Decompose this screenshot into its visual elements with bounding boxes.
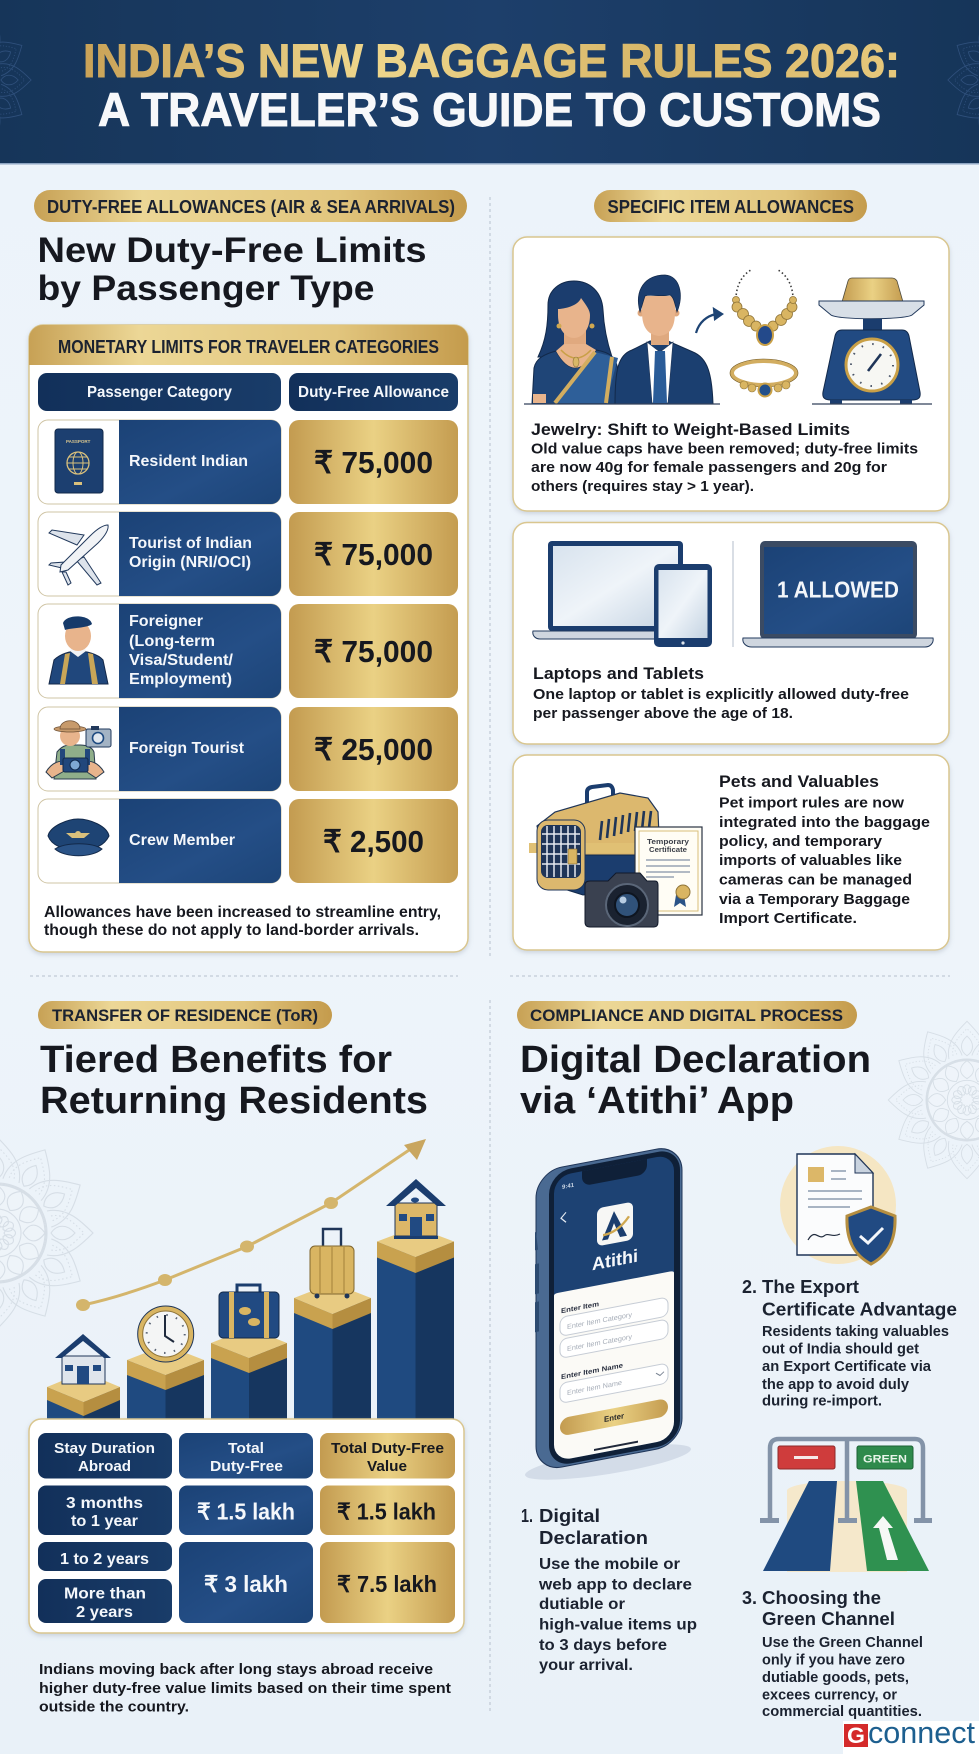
step 1 text: Use the mobile or xyxy=(539,1556,680,1573)
icon: passport: PASSPORT xyxy=(66,439,91,444)
section pill: TRANSFER OF RESIDENCE (ToR) xyxy=(52,1006,318,1025)
icon: phone with Atithi app: 9:41 xyxy=(562,1183,575,1191)
note xyxy=(39,1661,451,1716)
icon: phone with Atithi app: Enter xyxy=(604,1411,625,1424)
heading xyxy=(38,231,426,308)
table row: 3 months to 1 year: ₹ 1.5 lakh xyxy=(337,1498,436,1524)
text: pets: via a Temporary Baggage xyxy=(719,891,910,908)
step 3 text: Choosing the xyxy=(762,1587,881,1608)
title xyxy=(83,34,900,136)
text: jewelry: others (requires stay > 1 year). xyxy=(531,478,754,495)
heading: New Duty-Free Limits xyxy=(38,231,426,270)
section pill: SPECIFIC ITEM ALLOWANCES xyxy=(608,197,854,217)
text: pets xyxy=(719,773,930,927)
heading xyxy=(40,1039,428,1122)
step 1 text: dutiable or xyxy=(539,1596,625,1613)
table: stay duration benefits xyxy=(29,1419,464,1633)
bar 5 xyxy=(377,1227,454,1420)
note: higher duty-free value limits based on their time spent xyxy=(39,1680,451,1697)
step 3 text: excees currency, or xyxy=(762,1688,897,1704)
step 1 text: high-value items up xyxy=(539,1616,697,1634)
section pill: DUTY-FREE ALLOWANCES (AIR & SEA ARRIVALS) xyxy=(47,197,455,217)
section pill xyxy=(594,190,867,222)
text: laptops: One laptop or tablet is explicitly allowed duty-free xyxy=(533,686,909,703)
panel: specific item allowances xyxy=(513,190,949,950)
section pill xyxy=(34,190,467,222)
panel: transfer of residence xyxy=(29,1001,464,1716)
step 2 text: during re-import. xyxy=(762,1394,882,1410)
table note: Allowances have been increased to streamline entry, xyxy=(44,904,441,921)
text: pets: policy, and temporary xyxy=(719,833,883,850)
column headers xyxy=(38,373,458,411)
table row: 3 months to 1 year: 3 months xyxy=(66,1495,143,1512)
step 1 text: 1. xyxy=(521,1505,533,1526)
table row: 3 months to 1 year xyxy=(38,1486,455,1535)
icon: phone with Atithi app: Enter Item xyxy=(561,1301,599,1315)
note: Indians moving back after long stays abroad receive xyxy=(39,1661,433,1678)
step 1 text: Declaration xyxy=(539,1527,648,1548)
column headers: Passenger Category xyxy=(87,384,232,401)
text: pets: Pets and Valuables xyxy=(719,773,879,791)
row: foreigner: Visa/Student/ xyxy=(129,652,234,669)
icon: necklace xyxy=(732,270,797,345)
bar 4 xyxy=(294,1283,371,1420)
text: jewelry: Jewelry: Shift to Weight-Based Limits xyxy=(531,421,850,439)
panel: compliance and digital process xyxy=(517,1001,957,1720)
icon: temporary certificate: Certificate xyxy=(649,847,687,854)
heading: via ‘Atithi’ App xyxy=(520,1080,794,1122)
step 3 text: dutiable goods, pets, xyxy=(762,1670,909,1686)
table note: though these do not apply to land-border arrivals. xyxy=(44,922,419,939)
table row: 3 months to 1 year: ₹ 1.5 lakh xyxy=(197,1498,295,1524)
table row: 1 to 2 years and more than 2 years: More than xyxy=(64,1586,146,1602)
table header: Total Duty-Free xyxy=(331,1440,444,1457)
icon: pet crate xyxy=(529,785,660,895)
icon: phone with Atithi app: Atithi xyxy=(592,1246,638,1274)
row: foreign tourist: Foreign Tourist xyxy=(129,740,244,757)
step 1 text: web app to declare xyxy=(538,1576,692,1594)
icon: camera xyxy=(585,873,658,927)
row: tourist of indian origin: Tourist of Indian xyxy=(129,535,252,552)
step 3 text: only if you have zero xyxy=(762,1652,905,1668)
heading xyxy=(520,1039,871,1122)
text: pets: imports of valuables like xyxy=(719,852,902,869)
icon: bracelet xyxy=(730,359,798,396)
table row: 1 to 2 years and more than 2 years: 1 to 2 years xyxy=(60,1551,149,1568)
step 1 text: Digital xyxy=(539,1505,600,1526)
row: foreign tourist: ₹ 25,000 xyxy=(314,732,433,767)
icon: temporary certificate: Temporary xyxy=(647,839,689,846)
icon: customs channels gate: GREEN xyxy=(863,1454,907,1466)
step 3 text xyxy=(742,1587,923,1720)
text: pets: integrated into the baggage xyxy=(719,814,930,831)
row: crew member: ₹ 2,500 xyxy=(323,824,424,859)
table header: Total xyxy=(228,1440,264,1457)
icon: phone with Atithi app: Enter Item Category xyxy=(567,1334,632,1353)
row: foreign tourist xyxy=(38,707,458,791)
step 3 text: Green Channel xyxy=(762,1608,895,1629)
panel: duty-free allowances xyxy=(29,190,468,952)
row: crew member: Crew Member xyxy=(129,832,235,849)
icon: phone with Atithi app: Enter Item Name xyxy=(561,1363,623,1381)
heading: Digital Declaration xyxy=(520,1039,871,1081)
row: tourist of indian origin: ₹ 75,000 xyxy=(314,537,433,572)
row: foreigner: (Long-term xyxy=(129,633,215,650)
table header: Stay Duration xyxy=(54,1440,155,1457)
icon: laptop and tablet xyxy=(533,541,712,647)
rising trend arrow xyxy=(76,1139,426,1311)
table row: 1 to 2 years and more than 2 years: ₹ 7.5 lakh xyxy=(337,1571,437,1597)
row: resident indian: Resident Indian xyxy=(129,453,248,470)
table note xyxy=(44,904,441,939)
step 2 text: the app to avoid duly xyxy=(762,1377,909,1393)
heading: Returning Residents xyxy=(40,1080,428,1122)
table header: Value xyxy=(367,1458,407,1475)
text: jewelry xyxy=(531,421,918,495)
icon: customs channels gate xyxy=(760,1439,932,1572)
icon: temporary certificate xyxy=(635,827,702,915)
title: A TRAVELER’S GUIDE TO CUSTOMS xyxy=(98,83,881,136)
row: tourist of indian origin xyxy=(38,512,458,596)
column headers: Duty-Free Allowance xyxy=(298,384,449,401)
icon: laptop with 1 allowed: 1 ALLOWED xyxy=(777,576,899,602)
card: laptops and tablets xyxy=(513,522,949,744)
bar chart: tiered pedestals xyxy=(47,1227,454,1420)
row: resident indian xyxy=(38,420,458,504)
step 2 text: out of India should get xyxy=(762,1342,919,1358)
text: laptops xyxy=(533,665,909,722)
icon: small house xyxy=(55,1334,111,1384)
table row: 1 to 2 years and more than 2 years: ₹ 3 lakh xyxy=(204,1571,288,1597)
bar 1 xyxy=(47,1372,120,1420)
step 1 text: your arrival. xyxy=(539,1657,633,1674)
icon: gold trolley bag xyxy=(310,1229,354,1298)
row: foreigner: ₹ 75,000 xyxy=(314,634,433,669)
logo: Gconnect: connect xyxy=(868,1715,975,1750)
icon: traveler with backpack xyxy=(49,616,108,684)
text: pets: Pet import rules are now xyxy=(719,794,904,812)
icon: airplane xyxy=(49,525,108,585)
table row: 1 to 2 years and more than 2 years xyxy=(38,1542,455,1623)
table row: 3 months to 1 year: to 1 year xyxy=(71,1513,138,1530)
step 3 text: Use the Green Channel xyxy=(762,1635,923,1651)
text: jewelry: Old value caps have been removed; duty-free limits xyxy=(531,440,918,458)
icon: laptop with 1 allowed xyxy=(743,541,933,647)
icon: phone with Atithi app xyxy=(535,1144,682,1472)
text: pets: cameras can be managed xyxy=(719,872,912,888)
row: resident indian: ₹ 75,000 xyxy=(314,445,433,480)
icon: clock xyxy=(138,1306,194,1362)
bar 2 xyxy=(127,1345,204,1420)
row: foreigner xyxy=(38,604,458,698)
step 3 text: 3. xyxy=(742,1587,757,1608)
icon: man xyxy=(615,275,713,404)
note: outside the country. xyxy=(39,1698,189,1716)
step 1 text xyxy=(521,1505,697,1674)
icon: pilot cap xyxy=(48,819,109,856)
table header xyxy=(38,1433,455,1478)
table header: Duty-Free xyxy=(210,1458,283,1475)
text: laptops: Laptops and Tablets xyxy=(533,665,704,683)
icon: blue suitcase xyxy=(219,1285,279,1338)
phone shadow xyxy=(523,1437,693,1487)
icon: woman xyxy=(532,281,618,404)
header banner xyxy=(0,0,979,164)
icon: arrow to jewelry xyxy=(696,309,722,333)
icon: tourist with camera xyxy=(46,721,111,779)
icon: phone with Atithi app: Enter Item Category xyxy=(567,1312,632,1331)
table card xyxy=(29,325,468,952)
table header: Abroad xyxy=(78,1458,131,1475)
step 2 text: an Export Certificate via xyxy=(762,1359,932,1375)
card: jewelry xyxy=(513,237,949,511)
step 2 text: 2. xyxy=(742,1276,757,1297)
row: foreigner: Foreigner xyxy=(129,613,203,630)
row: tourist of indian origin: Origin (NRI/OCI) xyxy=(129,554,251,571)
section pill xyxy=(517,1001,857,1029)
icon: weighing scale xyxy=(819,278,924,404)
icon: phone with Atithi app: Enter Item Name xyxy=(567,1380,622,1397)
step 3 text: commercial quantities. xyxy=(762,1704,922,1720)
heading: Tiered Benefits for xyxy=(40,1039,392,1081)
step 2 text xyxy=(742,1276,957,1410)
row: foreigner: Employment) xyxy=(129,671,232,688)
card: pets and valuables xyxy=(513,755,949,950)
section pill: COMPLIANCE AND DIGITAL PROCESS xyxy=(530,1006,843,1025)
table row: 1 to 2 years and more than 2 years: 2 years xyxy=(76,1604,133,1621)
section pill xyxy=(38,1001,332,1029)
heading: by Passenger Type xyxy=(38,269,374,308)
icon: export certificate xyxy=(780,1146,896,1264)
icon: passport xyxy=(55,429,103,493)
row: crew member xyxy=(38,799,458,883)
text: pets: Import Certificate. xyxy=(719,910,857,927)
logo: Gconnect: G xyxy=(847,1723,865,1748)
step 2 text: Certificate Advantage xyxy=(762,1298,957,1320)
bar 3 xyxy=(211,1328,287,1420)
text: jewelry: are now 40g for female passengers and 20g for xyxy=(531,459,887,476)
step 2 text: The Export xyxy=(762,1276,859,1297)
step 2 text: Residents taking valuables xyxy=(762,1324,949,1340)
step 1 text: to 3 days before xyxy=(539,1637,667,1654)
title: INDIA’S NEW BAGGAGE RULES 2026: xyxy=(83,34,900,87)
icon: gold house xyxy=(386,1179,446,1239)
text: laptops: per passenger above the age of 18. xyxy=(533,705,793,722)
table card: MONETARY LIMITS FOR TRAVELER CATEGORIES xyxy=(58,337,439,357)
